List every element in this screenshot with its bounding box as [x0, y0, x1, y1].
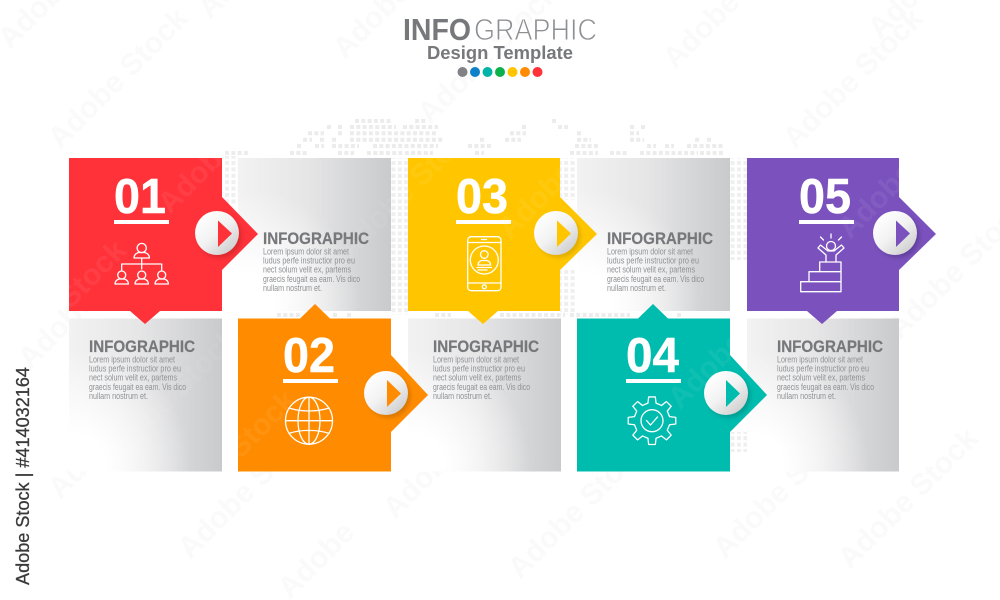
vertical stock credit: Adobe Stock | #414032164	[13, 367, 33, 585]
watermark overlay: Stock	[52, 234, 133, 315]
watermark layer: Adobe Stock	[832, 422, 985, 575]
number 05: 05	[799, 170, 851, 224]
watermark overlay: Adobe	[492, 156, 581, 245]
number 01: 01	[114, 170, 166, 224]
panel: text 3	[408, 318, 561, 472]
title: INFO	[403, 12, 471, 47]
icon: phone	[468, 237, 501, 291]
watermark layer: Adobe Stock	[377, 372, 530, 525]
panel: text 4: INFOGRAPHIC	[607, 230, 713, 248]
panel: text 4: nect solum velit ex, partems	[607, 265, 695, 275]
panel: text 4: nullam nostrum et.	[607, 283, 666, 293]
title: GRAPHIC	[474, 12, 597, 47]
watermark overlay: Stock	[742, 394, 823, 475]
panel: text 2: nect solum velit ex, partems	[89, 373, 177, 383]
world map dotted background	[224, 121, 747, 452]
watermark layer: Adobe Stock	[172, 412, 325, 565]
panel: text 5	[747, 318, 899, 472]
panel: text 5: graecis feugait ea eam. Vis dico	[777, 382, 874, 392]
panel: text 1: nullam nostrum et.	[263, 283, 322, 293]
panel: text 1: INFOGRAPHIC	[263, 230, 369, 248]
watermark overlay: Adobe Stock	[332, 112, 485, 265]
panel: text 5: Lorem ipsum dolor sit amet	[777, 354, 863, 364]
panel: text 5: nullam nostrum et.	[777, 391, 836, 401]
panel: text 2: Lorem ipsum dolor sit amet	[89, 354, 175, 364]
panel: text 2: graecis feugait ea eam. Vis dico	[89, 382, 186, 392]
panel: text 3: nullam nostrum et.	[433, 391, 492, 401]
step 03 yellow	[408, 158, 597, 324]
icon: globe	[286, 397, 332, 444]
panel: text 4: graecis feugait ea eam. Vis dico	[607, 274, 704, 284]
number 04: 04	[626, 329, 679, 383]
step 04 teal	[577, 304, 767, 472]
watermark overlay	[52, 112, 921, 475]
panel: text 1: ludus perfe instructior pro eu	[263, 256, 355, 266]
step 02 orange	[238, 304, 428, 472]
number 03: 03	[456, 170, 508, 224]
panel: text 2: ludus perfe instructior pro eu	[89, 364, 181, 374]
icon: gear with check	[628, 397, 676, 444]
title: Design Template	[427, 43, 573, 63]
watermark layer: Adobe	[12, 286, 101, 375]
panel: text 1: Lorem ipsum dolor sit amet	[263, 246, 349, 256]
panel: text 3: INFOGRAPHIC	[433, 338, 539, 356]
panel: text 2: nullam nostrum et.	[89, 391, 148, 401]
icon: org chart	[115, 243, 168, 284]
play button 04	[704, 371, 750, 418]
panel: text 3: nect solum velit ex, partems	[433, 373, 521, 383]
panel: text 1	[238, 158, 391, 311]
play button 05	[873, 211, 920, 258]
panel: text 2: INFOGRAPHIC	[89, 338, 195, 356]
watermark layer: Adobe Stock	[777, 2, 930, 155]
watermark overlay: Adobe	[662, 326, 751, 415]
watermark overlay: Adobe	[832, 156, 921, 245]
icon: person on stairs	[801, 234, 844, 292]
play button 02	[364, 371, 410, 418]
watermark layer: Adobe Stock	[42, 352, 195, 505]
title	[403, 12, 597, 63]
watermark overlay: Stock	[222, 384, 303, 465]
step 05 purple	[747, 158, 936, 324]
watermark overlay: Adobe Stock	[92, 322, 245, 475]
watermark layer: Adobe Stock	[707, 412, 860, 565]
number 02: 02	[283, 329, 335, 383]
panel: text 4	[577, 158, 730, 311]
colour dots row	[458, 67, 542, 77]
step 01 red	[69, 158, 258, 324]
panel: text 2	[69, 318, 222, 472]
panel: text 3: ludus perfe instructior pro eu	[433, 364, 525, 374]
play button 01	[195, 211, 242, 258]
panel: text 1: graecis feugait ea eam. Vis dico	[263, 274, 360, 284]
panel: text 3: graecis feugait ea eam. Vis dico	[433, 382, 530, 392]
panel: text 5: ludus perfe instructior pro eu	[777, 364, 869, 374]
panel: text 4: ludus perfe instructior pro eu	[607, 256, 699, 266]
watermark layer: Adobe Stock	[502, 432, 655, 585]
panel: text 1: nect solum velit ex, partems	[263, 265, 351, 275]
watermark overlay: Adobe	[152, 131, 241, 220]
watermark layer: Adobe Stock	[42, 2, 195, 155]
panel: text 4: Lorem ipsum dolor sit amet	[607, 246, 693, 256]
panel: text 3: Lorem ipsum dolor sit amet	[433, 354, 519, 364]
panel: text 5: nect solum velit ex, partems	[777, 373, 865, 383]
panel: text 5: INFOGRAPHIC	[777, 338, 883, 356]
play button 03	[534, 211, 580, 258]
